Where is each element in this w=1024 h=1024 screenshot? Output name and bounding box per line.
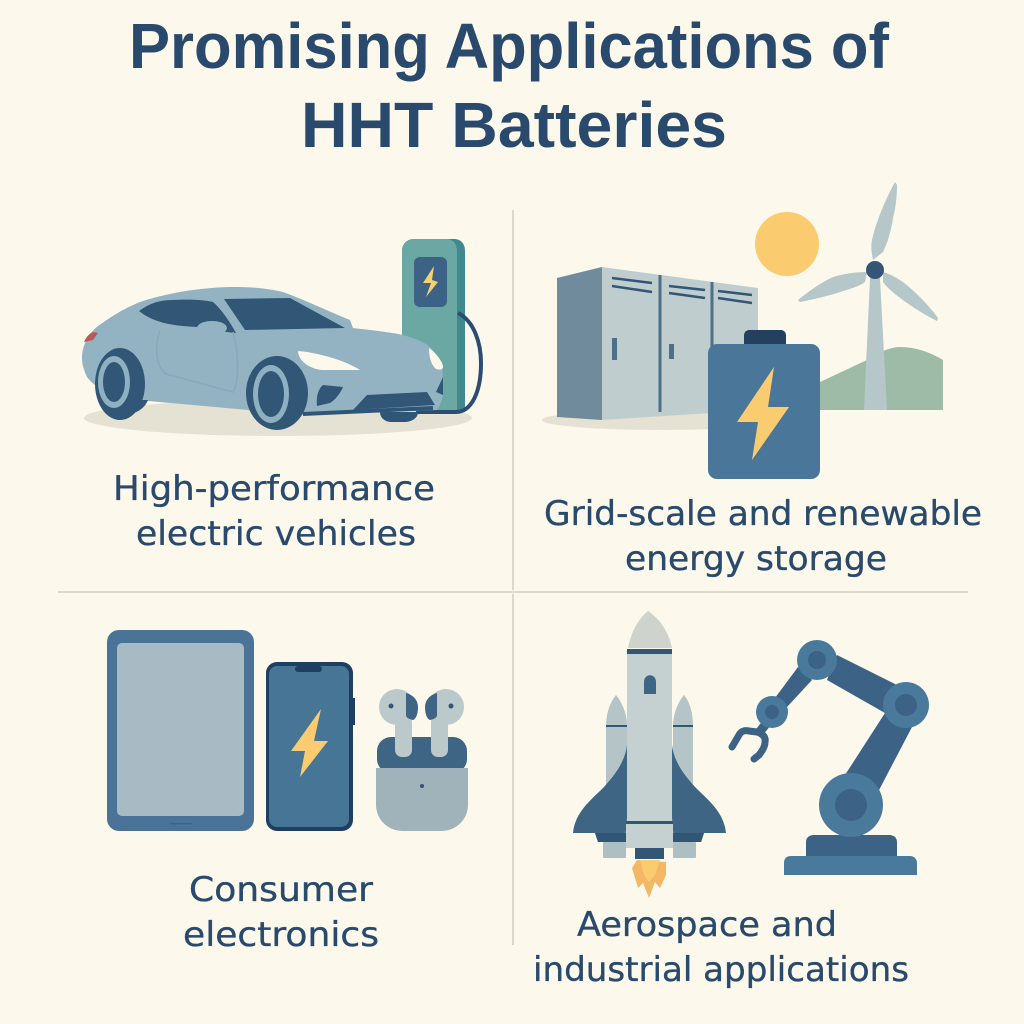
icon: robot arm [732,640,929,875]
icon: sun [755,212,819,276]
icon: earbuds [376,689,468,831]
label: consumer electronics: Consumer [189,870,373,910]
icon: rocket [573,611,726,898]
icon: car shadow [84,400,472,436]
panel: consumer electronics [107,630,468,955]
icon: battery cabinets [557,267,758,420]
panel: grid storage [542,182,982,579]
icon: wind turbine [798,182,938,410]
label: aerospace and industrial [533,905,909,990]
title: HHT Batteries [301,89,727,161]
icon: ground shadow [542,410,778,430]
icon: battery [708,330,820,479]
label: electric vehicles: High-performance [113,469,435,509]
label: grid storage: Grid-scale and renewable [544,494,982,534]
panel: aerospace and industrial [533,611,929,990]
label: consumer electronics: electronics [183,915,379,955]
label: grid storage [544,494,982,579]
label: consumer electronics [183,870,379,955]
label: aerospace and industrial: Aerospace and [577,905,837,945]
icon: tablet [107,630,254,831]
label: electric vehicles [113,469,435,554]
icon: charging station [402,239,481,412]
title: Promising Applications of [129,10,890,82]
title [129,10,890,161]
label: grid storage: energy storage [625,539,887,579]
panel: electric vehicles [82,239,481,554]
label: aerospace and industrial: industrial applications [533,950,909,990]
label: electric vehicles: electric vehicles [136,514,416,554]
icon: phone [266,662,355,831]
icon: car [82,287,443,430]
icon: hill [820,347,943,410]
